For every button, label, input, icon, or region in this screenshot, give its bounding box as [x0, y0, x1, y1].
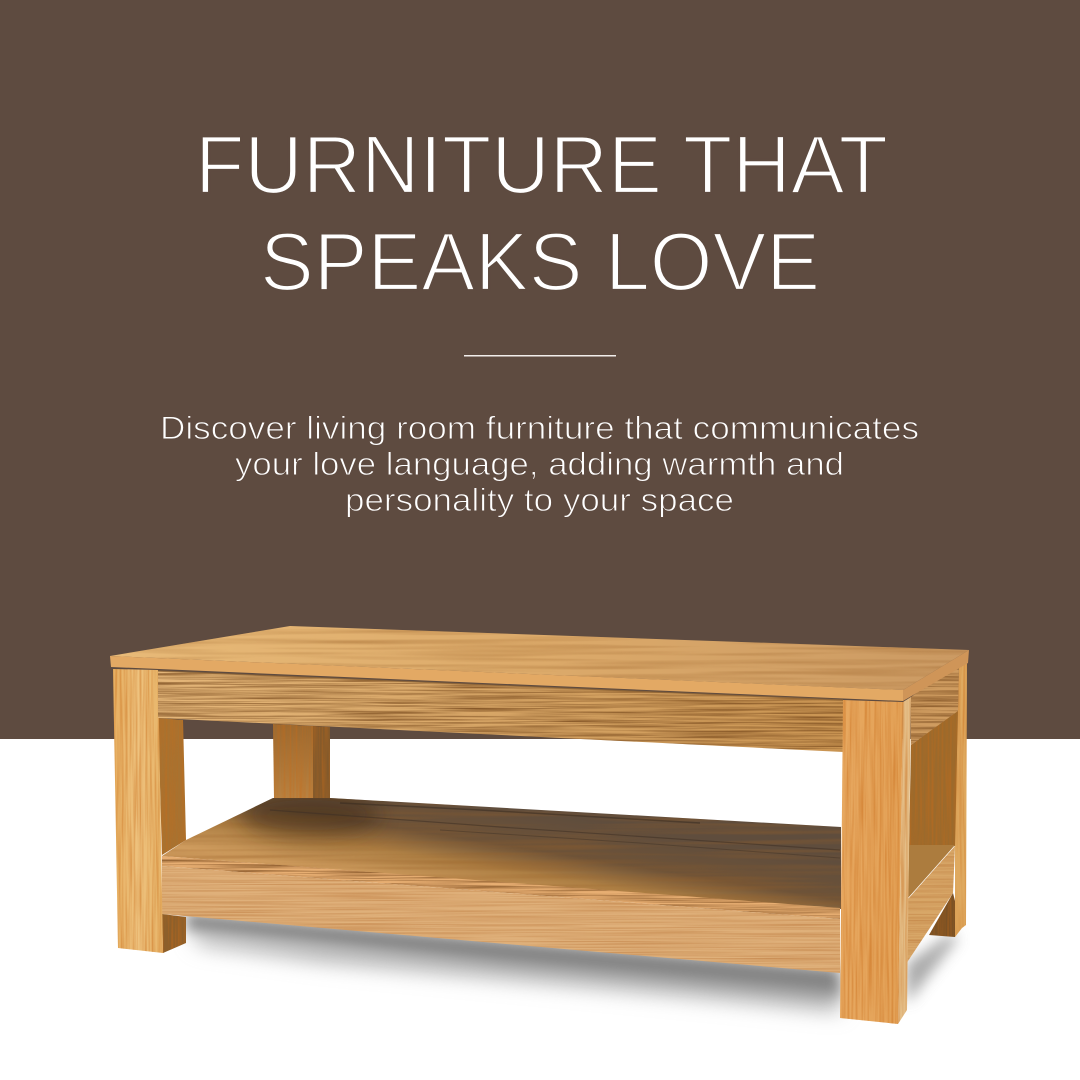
description text — [160, 410, 919, 518]
back right leg and inner wood — [909, 660, 967, 937]
lower shelf front face — [162, 856, 840, 973]
coffee table illustration — [110, 626, 969, 1024]
lower shelf surface — [162, 793, 955, 909]
table top — [110, 626, 969, 701]
front left leg — [113, 669, 186, 953]
description text: your love language, adding warmth and — [235, 446, 844, 482]
title: SPEAKS LOVE — [260, 215, 820, 308]
divider line under title — [464, 355, 616, 356]
right lower shelf rail — [906, 846, 955, 964]
right side apron — [911, 663, 959, 745]
description text: Discover living room furniture that communicates — [160, 410, 919, 446]
front right leg — [840, 697, 911, 1024]
front apron — [158, 671, 843, 752]
title: FURNITURE THAT — [195, 118, 888, 211]
back left leg — [273, 724, 330, 801]
floor shadow — [186, 912, 958, 1012]
description text: personality to your space — [345, 482, 734, 518]
shadow cast by back leg — [240, 793, 380, 837]
title — [195, 118, 888, 308]
brown background panel — [0, 0, 1080, 739]
